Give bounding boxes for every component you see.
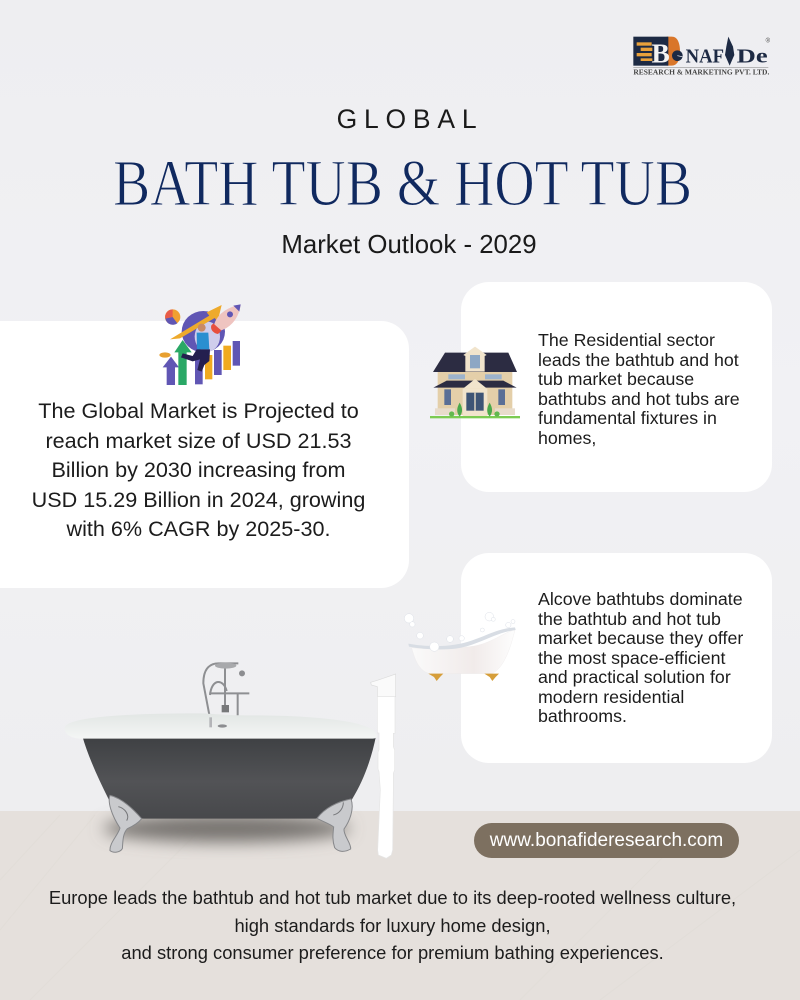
alcove text: bathrooms. xyxy=(538,706,627,726)
claw feet xyxy=(109,795,352,852)
residential text: The Residential sector xyxy=(538,330,715,350)
tub rim xyxy=(65,713,377,739)
alcove text: modern residential xyxy=(538,686,684,706)
panel: residential sector xyxy=(461,282,772,492)
subtitle: Market Outlook - 2029 xyxy=(281,231,537,259)
website badge xyxy=(474,823,739,858)
residential text: bathtubs and hot tubs are xyxy=(538,388,740,408)
icon: small white bathtub with bubbles xyxy=(404,612,516,681)
projection text: USD 15.29 Billion in 2024, growing xyxy=(32,486,365,512)
logo: Bonafide Research: De xyxy=(737,45,768,67)
panel: alcove bathtubs xyxy=(461,553,772,763)
logo: Bonafide Research: NAF xyxy=(686,45,724,67)
residential text xyxy=(538,330,740,448)
panel: global market projection xyxy=(0,321,409,588)
footer text xyxy=(49,887,736,963)
projection text: with 6% CAGR by 2025-30. xyxy=(66,516,331,541)
projection text: Billion by 2030 increasing from xyxy=(51,457,346,482)
residential text: leads the bathtub and hot xyxy=(538,350,739,370)
alcove text: the most space-efficient xyxy=(538,648,725,668)
footer text: high standards for luxury home design, xyxy=(234,914,551,936)
heading: GLOBAL: GLOBAL xyxy=(337,104,483,134)
alcove text xyxy=(538,589,743,726)
floor shadow xyxy=(103,814,350,842)
icon: growth chart with person and rocket xyxy=(159,304,241,385)
faucet xyxy=(203,663,249,727)
residential text: tub market because xyxy=(538,369,694,389)
projection text: reach market size of USD 21.53 xyxy=(45,428,352,452)
tub body xyxy=(82,736,376,819)
alcove text: and practical solution for xyxy=(538,667,731,687)
alcove text: market because they offer xyxy=(538,628,743,648)
icon: house xyxy=(430,346,520,418)
logo: Bonafide Research: B xyxy=(652,38,670,68)
alcove text: Alcove bathtubs dominate xyxy=(538,589,743,609)
column xyxy=(371,674,396,697)
logo: Bonafide Research: ® xyxy=(766,37,771,44)
projection text xyxy=(32,398,365,541)
alcove text: the bathtub and hot tub xyxy=(538,608,721,628)
footer text: and strong consumer preference for premium bathing experiences. xyxy=(121,942,664,963)
illustration: grey clawfoot bathtub with tap and column xyxy=(80,662,396,858)
logo: Bonafide Research: RESEARCH & MARKETING PVT. LTD. xyxy=(633,69,770,77)
residential text: fundamental fixtures in xyxy=(538,408,717,428)
footer text: Europe leads the bathtub and hot tub market due to its deep-rooted wellness culture, xyxy=(49,887,736,908)
projection text: The Global Market is Projected to xyxy=(38,398,359,423)
residential text: homes, xyxy=(538,428,596,448)
logo: Bonafide Research xyxy=(633,36,771,77)
website badge: www.bonafideresearch.com xyxy=(490,830,723,851)
